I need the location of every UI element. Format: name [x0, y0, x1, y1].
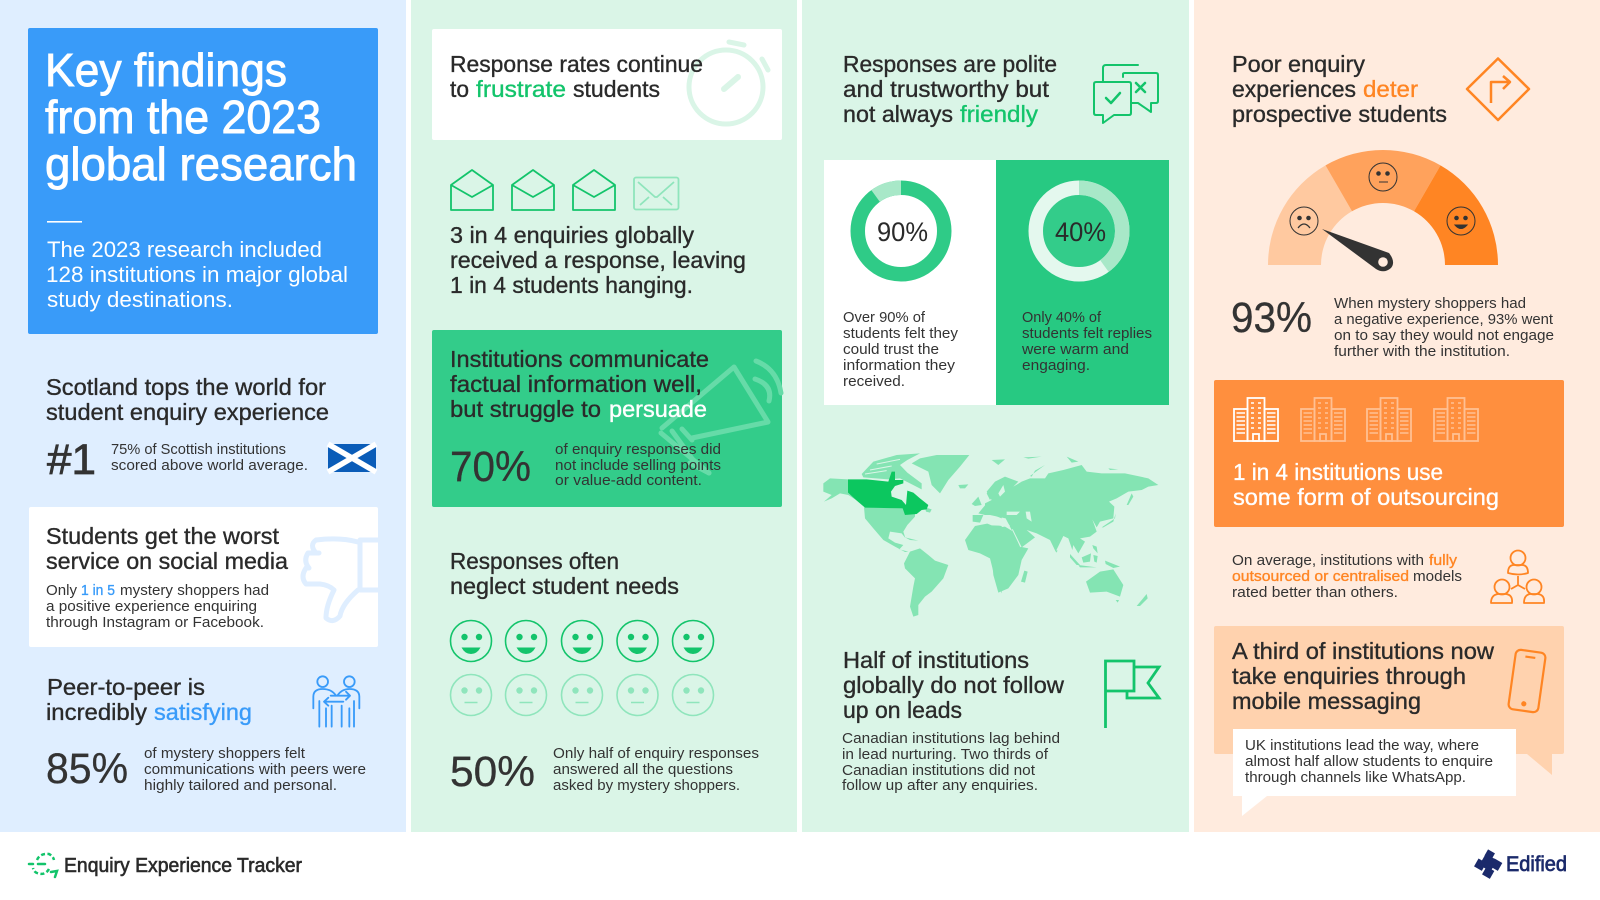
warmth text: were warm and: [1021, 341, 1129, 358]
needs text: answered all the questions: [553, 761, 733, 778]
face: unhappy: [1290, 207, 1318, 235]
needs text: Only half of enquiry responses: [553, 745, 759, 762]
icon: mobile phone: [1508, 649, 1546, 713]
heading: prospective students: [1232, 101, 1447, 127]
panel: persuade card: [432, 330, 782, 507]
heading: to: [450, 76, 469, 102]
warmth text: Only 40% of: [1022, 309, 1102, 326]
title: Key findings: [45, 44, 287, 96]
panel: 40 percent warmth card: [996, 160, 1169, 405]
heading: globally do not follow: [843, 672, 1064, 698]
stat: number one: #1: [47, 436, 96, 484]
icon: opened envelope: [451, 170, 493, 210]
section: student needs: [450, 548, 759, 796]
panel: social media card: [29, 507, 378, 647]
heading: students: [573, 76, 660, 102]
heading: [46, 374, 329, 425]
heading: and trustworthy but: [843, 76, 1050, 102]
icon: megaphone: [661, 361, 781, 473]
Scotland text: scored above world average.: [111, 457, 308, 474]
icon: faded building: [1367, 398, 1411, 441]
heading: service on social media: [46, 548, 288, 574]
heading: frustrate: [476, 76, 566, 102]
needs text: [553, 745, 759, 794]
deterrence text: further with the institution.: [1334, 343, 1510, 360]
heading: [1232, 51, 1447, 127]
heading: [450, 346, 709, 422]
heading: incredibly: [46, 699, 148, 725]
lead nurturing text: [842, 730, 1060, 794]
panel: column one background: [0, 0, 406, 832]
trust text: could trust the: [843, 341, 939, 358]
section: outsourced models: [1232, 550, 1544, 603]
deterrence text: a negative experience, 93% went: [1334, 311, 1554, 328]
social media text: through Instagram or Facebook.: [46, 614, 264, 631]
models text: On average, institutions with: [1232, 552, 1424, 569]
face: neutral: [1369, 163, 1397, 191]
heading: Poor enquiry: [1232, 51, 1365, 77]
heading: Responses often: [450, 548, 619, 574]
footer logo: Edified: [1474, 849, 1567, 879]
section: lead follow up: [842, 647, 1159, 794]
icon: network of people: [1491, 550, 1544, 603]
lead nurturing text: Canadian institutions lag behind: [842, 730, 1060, 747]
persuade text: or value-add content.: [555, 472, 702, 489]
title: from the 2023: [45, 91, 321, 143]
icon: chat bubbles: [1094, 65, 1158, 123]
heading: persuade: [609, 396, 707, 422]
heading: up on leads: [843, 697, 962, 723]
icon: opened envelope: [573, 170, 615, 210]
lead nurturing text: follow up after any enquiries.: [842, 777, 1038, 794]
donut chart: 40 percent: 40%: [1055, 217, 1106, 247]
gauge chart: [1268, 150, 1498, 271]
stat: 50 percent: 50%: [450, 748, 535, 796]
peer text: communications with peers were: [144, 761, 366, 778]
heading: Responses are polite: [843, 51, 1057, 77]
trust text: [843, 309, 959, 390]
icon: Scottish flag: [328, 444, 376, 472]
donut chart: 90 percent: 90%: [877, 217, 928, 247]
heading: [1232, 638, 1494, 714]
models text: [1232, 552, 1462, 601]
heading: [450, 51, 703, 102]
section: poor experiences: [1232, 51, 1529, 127]
heading: satisfying: [154, 699, 252, 725]
social media text: Only: [46, 582, 78, 599]
peer text: highly tailored and personal.: [144, 777, 337, 794]
speech bubble: [1233, 729, 1516, 816]
trust text: Over 90% of: [843, 309, 926, 326]
deterrence text: [1334, 295, 1554, 360]
title: [45, 44, 357, 190]
envelope statistic: 1 in 4 students hanging.: [450, 272, 693, 298]
panel: column three background: [802, 0, 1189, 832]
warmth text: engaging.: [1022, 357, 1090, 374]
panel: mobile messaging card: [1214, 626, 1564, 816]
models text: fully: [1429, 552, 1458, 569]
section: 93 percent: [1231, 294, 1554, 360]
world map with Canada highlighted: [823, 453, 1158, 617]
section: polite responses: [843, 51, 1158, 127]
heading: but struggle to: [450, 396, 601, 422]
heading: mobile messaging: [1232, 688, 1421, 714]
research summary: The 2023 research included: [47, 237, 322, 262]
heading: not always: [843, 101, 953, 127]
heading: [843, 51, 1057, 127]
Scotland text: [111, 441, 308, 474]
lead nurturing text: in lead nurturing. Two thirds of: [842, 746, 1049, 763]
heading: [450, 548, 679, 599]
speech bubble: almost half allow students to enquire: [1245, 753, 1493, 770]
icon: flag: [1106, 661, 1159, 728]
models text: rated better than others.: [1232, 584, 1398, 601]
speech bubble: through channels like WhatsApp.: [1245, 769, 1466, 786]
heading: Scotland tops the world for: [46, 374, 326, 400]
social media text: 1 in 5: [81, 582, 115, 599]
icon: stopwatch: [689, 42, 768, 124]
envelope statistic: 3 in 4 enquiries globally: [450, 222, 694, 248]
models text: models: [1413, 568, 1462, 585]
icon: thumbs down: [303, 539, 378, 621]
heading: [46, 674, 252, 725]
icon: road turn sign: [1467, 58, 1529, 120]
heading: [843, 647, 1064, 723]
icon: closed envelope: [634, 178, 678, 210]
panel: outsourcing card: [1214, 380, 1564, 527]
heading: friendly: [960, 101, 1039, 127]
models text: outsourced or centralised: [1232, 568, 1409, 585]
deterrence text: on to say they would not engage: [1334, 327, 1554, 344]
warmth text: [1021, 309, 1152, 374]
social media text: [46, 582, 269, 631]
panel: column two background: [411, 0, 797, 832]
section: Scotland: [46, 374, 376, 484]
envelope statistic: received a response, leaving: [450, 247, 746, 273]
heading: factual information well,: [450, 371, 702, 397]
speech bubble: UK institutions lead the way, where: [1245, 737, 1479, 754]
donut chart: 90 percent: [858, 188, 944, 274]
icon: faded building: [1434, 398, 1478, 441]
peer text: [144, 745, 366, 794]
section: envelopes: [450, 170, 746, 298]
warmth text: students felt replies: [1022, 325, 1152, 342]
Scotland text: 75% of Scottish institutions: [111, 441, 286, 458]
heading: deter: [1363, 76, 1418, 102]
section: peer to peer: [46, 674, 366, 794]
persuade text: of enquiry responses did: [555, 441, 721, 458]
heading: student enquiry experience: [46, 399, 329, 425]
persuade text: [555, 441, 721, 489]
heading: Half of institutions: [843, 647, 1029, 673]
social media text: a positive experience enquiring: [46, 598, 257, 615]
trust text: students felt they: [843, 325, 959, 342]
panel: 90 percent trust card: [824, 160, 996, 405]
icon: two peers: [313, 676, 359, 727]
heading: 1 in 4 institutions use: [1233, 459, 1443, 485]
icons: satisfied faces: [450, 620, 714, 662]
deterrence text: When mystery shoppers had: [1334, 295, 1526, 312]
trust text: received.: [843, 373, 905, 390]
stat: 85 percent: 85%: [46, 745, 128, 793]
panel: column four background: [1194, 0, 1600, 832]
heading: some form of outsourcing: [1233, 484, 1499, 510]
stat: 70 percent: 70%: [450, 443, 531, 491]
heading: Peer-to-peer is: [47, 674, 205, 700]
heading: Response rates continue: [450, 51, 703, 77]
footer logo: Enquiry Experience Tracker: Enquiry Experience Tracker: [64, 855, 302, 877]
gauge needle: [1322, 229, 1393, 271]
heading: neglect student needs: [450, 573, 679, 599]
heading: Students get the worst: [46, 523, 280, 549]
heading: [1233, 459, 1499, 510]
title: global research: [45, 138, 357, 190]
envelope statistic: [450, 222, 746, 298]
heading: take enquiries through: [1232, 663, 1466, 689]
persuade text: not include selling points: [555, 457, 721, 474]
icon: highlighted building: [1234, 398, 1278, 441]
icons: neutral faces: [450, 674, 714, 716]
heading: A third of institutions now: [1232, 638, 1494, 664]
lead nurturing text: Canadian institutions did not: [842, 762, 1036, 779]
icon: opened envelope: [512, 170, 554, 210]
face: happy: [1447, 207, 1475, 235]
social media text: mystery shoppers had: [120, 582, 269, 599]
icon: faded building: [1301, 398, 1345, 441]
panel: response rates card: [432, 29, 782, 140]
heading: [46, 523, 288, 574]
heading: experiences: [1232, 76, 1356, 102]
research summary: study destinations.: [47, 287, 233, 312]
needs text: asked by mystery shoppers.: [553, 777, 740, 794]
trust text: information they: [843, 357, 956, 374]
stat: 93 percent: 93%: [1231, 294, 1312, 342]
footer logo: Edified: Edified: [1506, 853, 1567, 876]
panel: key findings title card: [28, 28, 378, 334]
research summary: 128 institutions in major global: [46, 262, 348, 287]
peer text: of mystery shoppers felt: [144, 745, 306, 762]
heading: Institutions communicate: [450, 346, 709, 372]
research summary: [46, 237, 348, 312]
donut chart: 40 percent: [1036, 188, 1122, 274]
